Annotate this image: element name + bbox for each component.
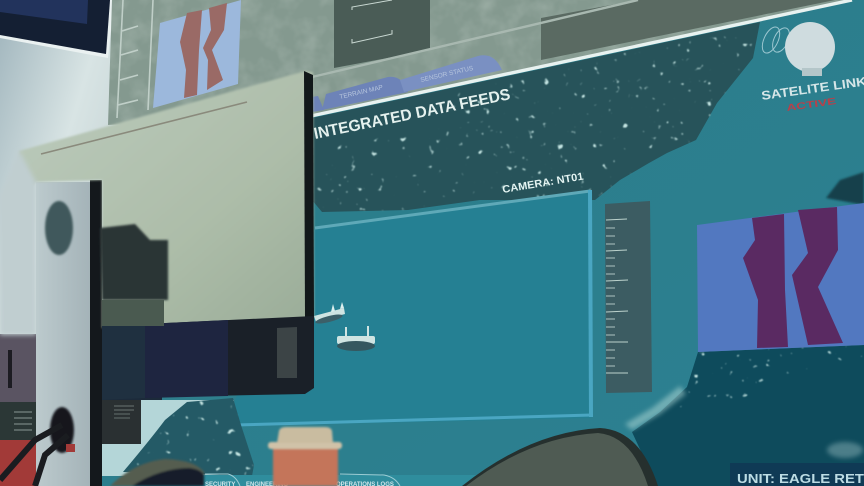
tab: terrain map: TERRAIN MAP	[339, 84, 384, 101]
upper data screen	[108, 0, 864, 125]
mount bracket	[100, 224, 168, 300]
coffee cup	[268, 427, 342, 486]
tab: terrain map	[322, 77, 408, 110]
depth scale	[605, 201, 652, 393]
small heat map	[153, 0, 241, 108]
stand port	[45, 201, 73, 255]
heading: INTEGRATED DATA FEEDS	[312, 86, 512, 143]
dark coast right edge	[826, 172, 864, 205]
chair back left	[110, 459, 204, 486]
camera panel	[235, 190, 592, 426]
dark sign box	[101, 400, 141, 444]
unit label: UNIT: EAGLE RET	[737, 471, 864, 486]
white divider line	[311, 0, 852, 116]
lower right coast	[625, 345, 864, 486]
dark camera block	[334, 0, 430, 68]
satellite link status: ACTIVE	[786, 96, 837, 114]
satellite link status: SATELITE LINK	[760, 74, 864, 103]
satellite link status	[759, 22, 864, 114]
tabs	[312, 55, 502, 112]
monitor back	[0, 71, 314, 400]
unit label	[730, 463, 864, 486]
dark coastline top	[312, 22, 760, 212]
monitor stand	[0, 180, 162, 486]
upper left screen	[0, 0, 114, 58]
chair back right	[462, 428, 658, 486]
bottom tab strip	[200, 474, 480, 486]
tab: sensor status: SENSOR STATUS	[420, 65, 475, 84]
thermal heat map	[697, 203, 864, 352]
monitor underside	[102, 316, 314, 398]
tab: sensor status	[400, 55, 502, 92]
monitor side edge	[304, 71, 314, 318]
wall	[0, 0, 120, 400]
left equipment	[0, 334, 38, 486]
drone 1	[314, 302, 345, 325]
icon: satellite dish	[759, 22, 835, 76]
camera label: CAMERA: NT01	[502, 171, 585, 196]
ruler	[117, 0, 153, 118]
cable grommet	[50, 407, 74, 453]
drone 2	[337, 326, 375, 351]
lower left island	[102, 398, 254, 476]
